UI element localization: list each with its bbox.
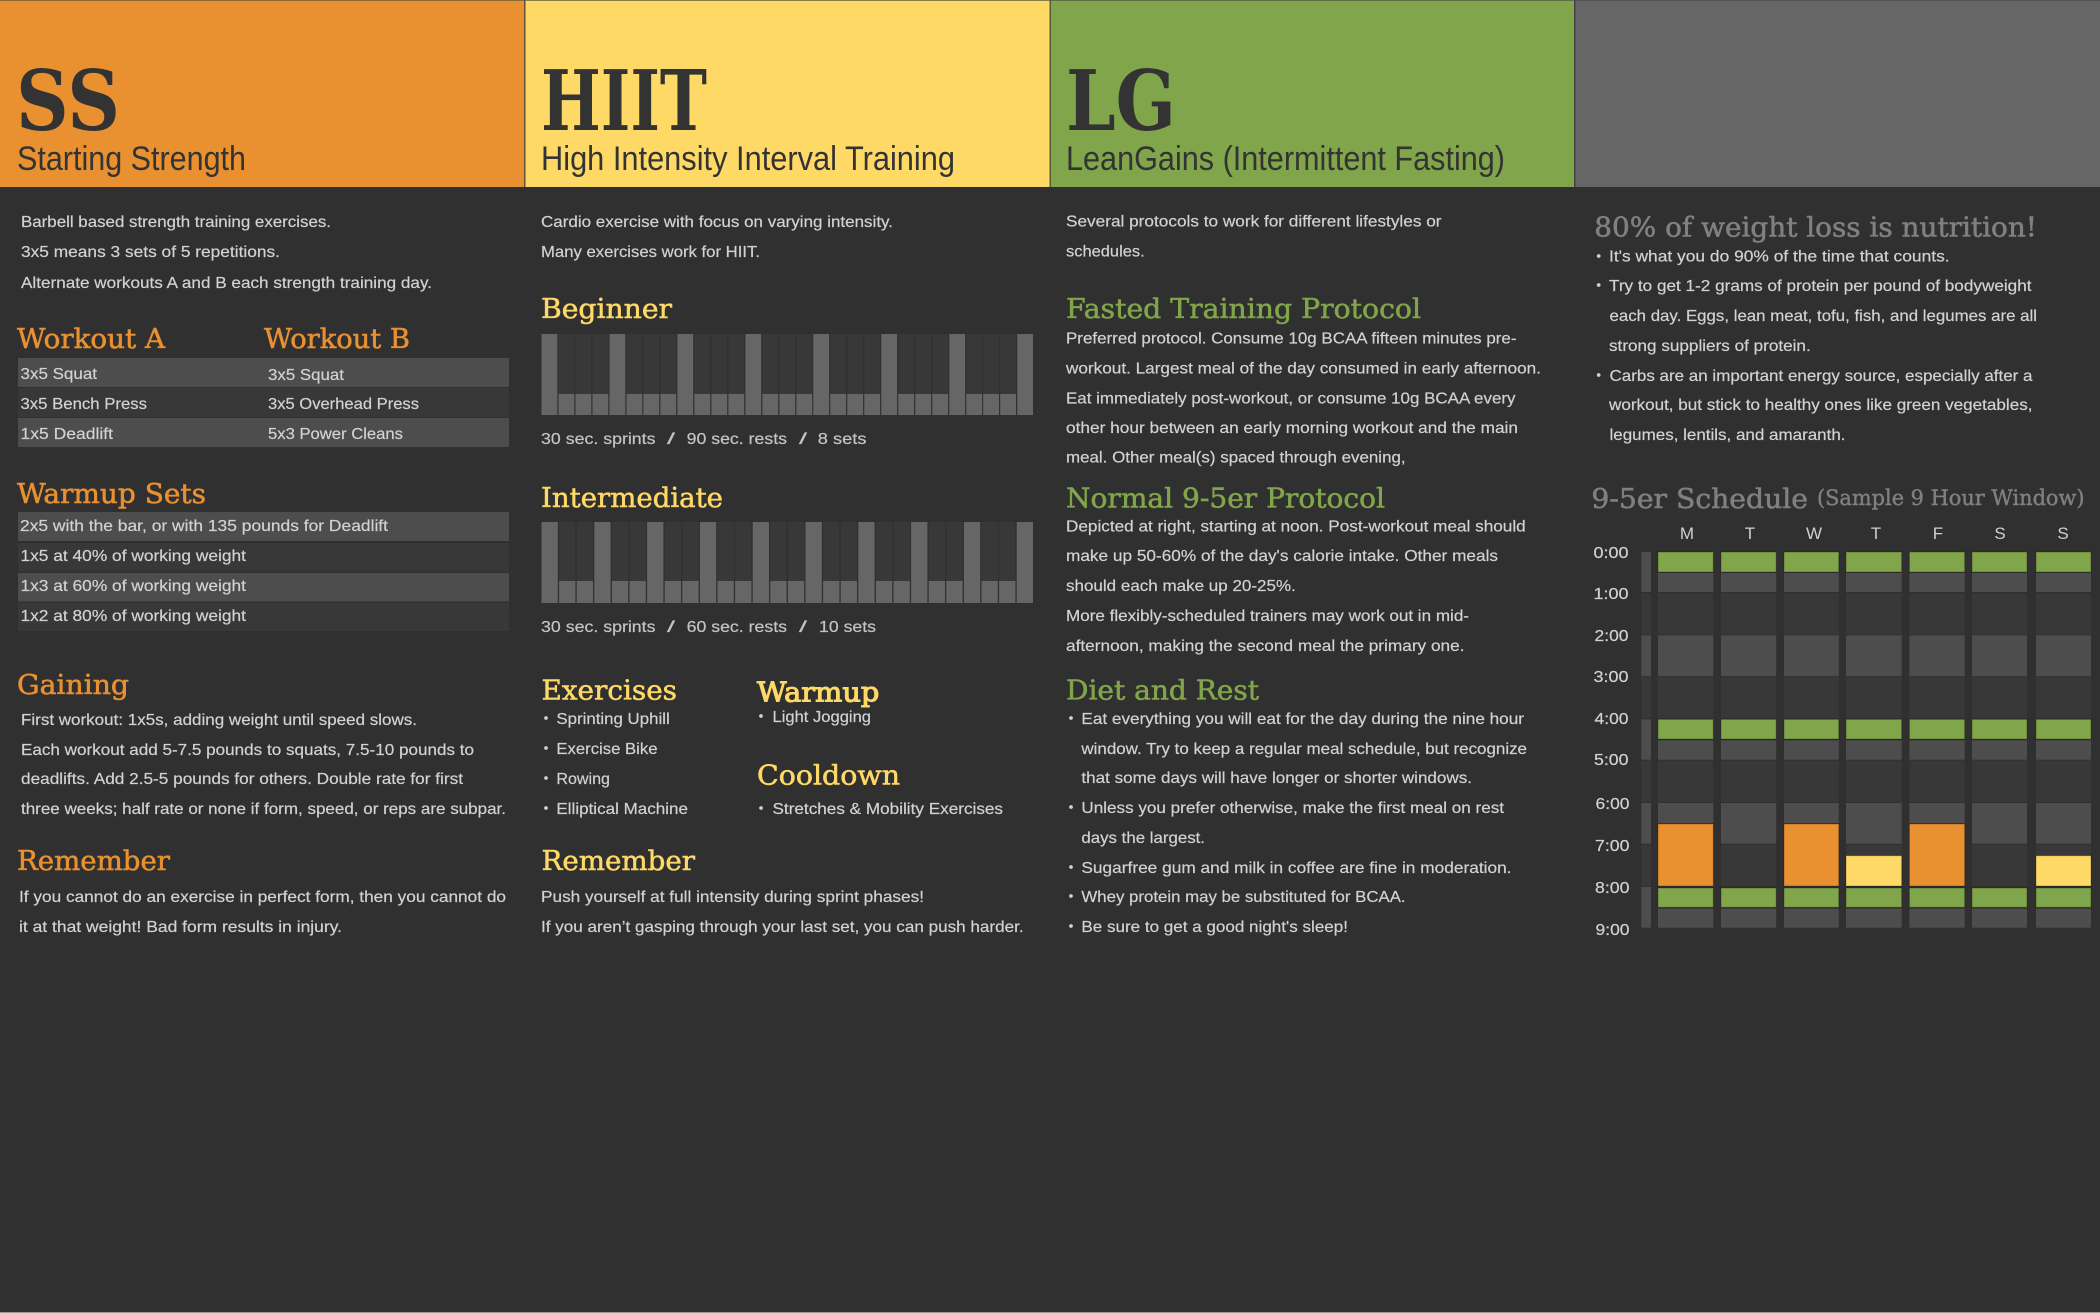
normal protocol text: Depicted at right, starting at noon. Post-workout meal should <box>1066 519 1526 536</box>
gaining text: First workout: 1x5s, adding weight until speed slows. <box>21 712 417 729</box>
title: HIIT: HIIT <box>541 52 707 150</box>
heading: 9-5er Schedule: 9-5er Schedule <box>1591 484 1808 515</box>
schedule: Sunday <box>2036 552 2091 928</box>
schedule day labels <box>1680 524 2069 543</box>
warmup table: 2x5 with the bar, or with 135 pounds for Deadlift <box>20 518 389 535</box>
header: HIIT <box>524 0 1050 187</box>
diet list: Be sure to get a good night's sleep! <box>1081 919 1348 936</box>
fasted protocol text: other hour between an early morning workout and the main <box>1066 420 1518 437</box>
diet list: Sugarfree gum and milk in coffee are fine in moderation. <box>1081 860 1512 877</box>
schedule hour labels: 0:00 <box>1594 545 1629 562</box>
heading: Beginner: Beginner <box>541 294 672 325</box>
heading: Workout B: Workout B <box>264 324 410 355</box>
header: LeanGains <box>1050 0 1575 187</box>
gaining text: deadlifts. Add 2.5-5 pounds for others. Double rate for first <box>21 771 464 788</box>
subtitle: High Intensity Interval Training: High Intensity Interval Training <box>541 140 955 178</box>
intro text <box>21 214 432 292</box>
warmup table: 1x5 at 40% of working weight <box>20 548 247 565</box>
heading: Remember: Remember <box>17 846 170 877</box>
title: LG: LG <box>1066 52 1176 150</box>
normal protocol text <box>1066 519 1526 655</box>
nutrition list: Try to get 1-2 grams of protein per pound of bodyweight <box>1609 278 2032 295</box>
schedule: Thursday <box>1846 552 1902 928</box>
heading: Gaining: Gaining <box>17 670 129 701</box>
schedule day labels: S <box>2057 524 2069 543</box>
workout table <box>18 358 509 447</box>
heading: Cooldown: Cooldown <box>757 760 900 791</box>
diet list: Eat everything you will eat for the day during the nine hour <box>1081 711 1525 728</box>
caption: beginner <box>541 431 866 448</box>
panel: LeanGains column <box>1065 214 1541 936</box>
intro text: Several protocols to work for different lifestyles or <box>1066 214 1442 231</box>
diet list: days the largest. <box>1081 830 1205 847</box>
fasted protocol text: Preferred protocol. Consume 10g BCAA fifteen minutes pre- <box>1066 331 1516 348</box>
schedule hour labels: 2:00 <box>1594 628 1629 645</box>
normal protocol text: should each make up 20-25%. <box>1066 578 1296 595</box>
remember text: it at that weight! Bad form results in injury. <box>19 919 342 936</box>
workout table: 5x3 Power Cleans <box>268 426 403 443</box>
intro text: Cardio exercise with focus on varying intensity. <box>541 214 893 231</box>
heading: Warmup: Warmup <box>757 678 879 709</box>
exercises list <box>544 711 688 818</box>
title: SS: SS <box>16 52 120 150</box>
schedule day labels: S <box>1994 524 2006 543</box>
workout table: 3x5 Bench Press <box>20 396 147 413</box>
schedule: Friday <box>1909 552 1965 928</box>
caption: beginner: 8 sets <box>818 431 866 448</box>
diet list: Unless you prefer otherwise, make the first meal on rest <box>1081 800 1505 817</box>
schedule day labels: W <box>1806 524 1822 543</box>
diet list: that some days will have longer or shorter windows. <box>1081 770 1472 787</box>
panel: HIIT column <box>541 214 1033 936</box>
diet list <box>1069 711 1527 936</box>
schedule day labels: F <box>1933 524 1943 543</box>
heading: Warmup Sets: Warmup Sets <box>17 479 206 510</box>
intro text: schedules. <box>1066 244 1145 261</box>
caption: intermediate: / <box>667 619 676 636</box>
intro text <box>541 214 893 261</box>
remember text <box>541 889 1024 936</box>
subtitle: LeanGains (Intermittent Fasting): LeanGains (Intermittent Fasting) <box>1066 140 1505 178</box>
remember text: If you aren’t gasping through your last set, you can push harder. <box>541 919 1024 936</box>
fasted protocol text: workout. Largest meal of the day consumed in early afternoon. <box>1065 361 1541 378</box>
schedule hour labels: 3:00 <box>1594 669 1629 686</box>
nutrition list: Carbs are an important energy source, especially after a <box>1610 368 2033 385</box>
heading: Remember: Remember <box>542 846 695 877</box>
diet list: window. Try to keep a regular meal schedule, but recognize <box>1080 741 1527 758</box>
caption: intermediate: / <box>799 619 808 636</box>
schedule hour labels <box>1594 545 1630 939</box>
cooldown list: Stretches & Mobility Exercises <box>772 801 1003 818</box>
caption: beginner: / <box>799 431 808 448</box>
workout table: 3x5 Overhead Press <box>268 396 419 413</box>
normal protocol text: afternoon, making the second meal the primary one. <box>1066 638 1464 655</box>
schedule: Monday <box>1658 552 1713 928</box>
intro text <box>1066 214 1442 261</box>
schedule hour labels: 9:00 <box>1596 922 1630 939</box>
caption: intermediate: 60 sec. rests <box>687 619 787 636</box>
nutrition list: legumes, lentils, and amaranth. <box>1610 427 1846 444</box>
heading: Fasted Training Protocol: Fasted Training Protocol <box>1066 294 1421 325</box>
schedule hour labels: 6:00 <box>1596 796 1630 813</box>
schedule hour labels: 5:00 <box>1594 752 1629 769</box>
remember text <box>19 889 506 936</box>
exercises list: Elliptical Machine <box>556 801 688 818</box>
remember text: If you cannot do an exercise in perfect form, then you cannot do <box>19 889 506 906</box>
header: empty grey panel <box>1574 0 2100 187</box>
schedule day labels: T <box>1745 524 1755 543</box>
subtitle: Starting Strength: Starting Strength <box>17 140 246 178</box>
nutrition list <box>1597 249 2037 444</box>
gaining text: three weeks; half rate or none if form, speed, or reps are subpar. <box>21 801 506 818</box>
workout table: 3x5 Squat <box>20 366 98 383</box>
heading: Diet and Rest: Diet and Rest <box>1066 675 1259 706</box>
intro text: 3x5 means 3 sets of 5 repetitions. <box>21 244 280 261</box>
caption: beginner: 30 sec. sprints <box>541 431 656 448</box>
remember text: Push yourself at full intensity during sprint phases! <box>541 889 924 906</box>
header: Starting Strength <box>0 0 525 187</box>
nutrition list: workout, but stick to healthy ones like green vegetables, <box>1608 397 2032 414</box>
caption: intermediate: 30 sec. sprints <box>541 619 656 636</box>
workout table: 1x5 Deadlift <box>20 426 114 443</box>
caption: intermediate: 10 sets <box>819 619 876 636</box>
exercises list: Exercise Bike <box>556 741 658 758</box>
schedule hour bar <box>1641 552 1651 928</box>
panel: nutrition column <box>1591 213 2091 939</box>
warmup table: 1x3 at 60% of working weight <box>20 578 247 595</box>
schedule hour labels: 4:00 <box>1594 711 1629 728</box>
diet list: Whey protein may be substituted for BCAA. <box>1081 889 1406 906</box>
nutrition list: It's what you do 90% of the time that counts. <box>1609 249 1950 266</box>
nutrition list: strong suppliers of protein. <box>1609 338 1811 355</box>
schedule day labels: T <box>1871 524 1881 543</box>
panel: Starting Strength column <box>17 214 509 936</box>
heading: 80% of weight loss is nutrition: 80% of weight loss is nutrition! <box>1594 213 2037 244</box>
normal protocol text: More flexibly-scheduled trainers may work out in mid- <box>1066 608 1469 625</box>
exercises list: Sprinting Uphill <box>556 711 670 728</box>
warmup table: 1x2 at 80% of working weight <box>20 608 247 625</box>
exercises list: Rowing <box>556 771 610 788</box>
schedule hour labels: 7:00 <box>1595 838 1630 855</box>
schedule day labels: M <box>1680 524 1694 543</box>
fasted protocol text: Eat immediately post-workout, or consume 10g BCAA every <box>1066 391 1516 408</box>
intro text: Many exercises work for HIIT. <box>541 244 760 261</box>
normal protocol text: make up 50-60% of the day's calorie intake. Other meals <box>1066 548 1498 565</box>
chart: intermediate intervals <box>542 522 1033 603</box>
gaining text: Each workout add 5-7.5 pounds to squats, 7.5-10 pounds to <box>21 742 474 759</box>
schedule: Tuesday <box>1721 552 1776 928</box>
schedule: Wednesday <box>1784 552 1839 928</box>
chart: beginner intervals <box>542 334 1033 415</box>
fasted protocol text: meal. Other meal(s) spaced through evening, <box>1066 450 1406 467</box>
warmup list: Light Jogging <box>772 709 871 726</box>
warmup table <box>18 512 509 631</box>
workout table: 3x5 Squat <box>268 367 345 384</box>
subheading: Sample 9 Hour Window: (Sample 9 Hour Window) <box>1817 486 2084 510</box>
schedule hour labels: 8:00 <box>1595 880 1630 897</box>
heading: Exercises: Exercises <box>542 675 677 706</box>
fasted protocol text <box>1065 331 1541 467</box>
caption: intermediate <box>541 619 876 636</box>
schedule: Saturday <box>1972 552 2027 928</box>
caption: beginner: / <box>667 431 676 448</box>
heading: Workout A: Workout A <box>17 324 166 355</box>
intro text: Alternate workouts A and B each strength training day. <box>21 275 432 292</box>
intro text: Barbell based strength training exercises. <box>21 214 331 231</box>
gaining text <box>21 712 506 818</box>
heading: Normal 9-5er Protocol: Normal 9-5er Protocol <box>1066 483 1385 514</box>
schedule hour labels: 1:00 <box>1594 586 1629 603</box>
heading: Intermediate: Intermediate <box>541 483 723 514</box>
nutrition list: each day. Eggs, lean meat, tofu, fish, and legumes are all <box>1610 308 2037 325</box>
caption: beginner: 90 sec. rests <box>687 431 787 448</box>
